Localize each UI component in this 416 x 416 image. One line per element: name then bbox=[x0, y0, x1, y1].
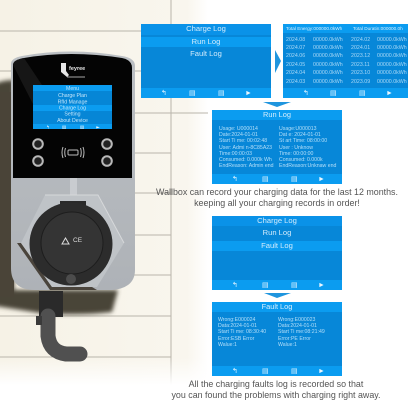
screen: fault log bbox=[212, 302, 342, 376]
display: ▤ bbox=[80, 125, 84, 130]
charger body bbox=[11, 52, 135, 290]
screen: charge log menu: ▤ bbox=[189, 90, 196, 96]
screen: monthly totals: 2024.02 2024.01 2023.12 2023.11 2023.10 2023.09 bbox=[351, 36, 370, 85]
screen: charge log menu bbox=[141, 24, 271, 98]
caption: charging records bbox=[156, 186, 398, 208]
screen: run log bbox=[212, 110, 342, 184]
screen: charge log menu: Charge Log bbox=[186, 24, 226, 33]
screen: monthly totals: 00000.0kWh 00000.0kWh 00000.0kWh 00000.0kWh 00000.0kWh 00000.0kWh bbox=[313, 36, 343, 85]
screen: fault log: Fault Log bbox=[262, 302, 292, 311]
screen: run log: Run Log bbox=[263, 110, 291, 119]
socket cover bbox=[30, 201, 112, 286]
screen: run log: Usage: U000014 Date:2024-01-01 Start Ti me: 00:02:48 User: Admi n-8C85A23 Time:00:00:03 Consumed: 0.000k Wh EndReason: Admin end bbox=[219, 126, 274, 169]
screen: charge log menu: ▤ bbox=[218, 90, 225, 96]
screen: monthly totals: ► bbox=[386, 90, 393, 96]
screen: fault log menu: Fault Log bbox=[261, 241, 293, 250]
control buttons bbox=[33, 139, 112, 166]
screen: monthly totals: ↰ bbox=[303, 90, 309, 96]
screen: fault log: ▤ bbox=[291, 368, 298, 374]
caption: fault records: you can found the problems with charging right away. bbox=[171, 390, 380, 400]
RFID symbol bbox=[62, 147, 84, 158]
caption: charging records: Wallbox can record your charging data for the last 12 months. bbox=[156, 186, 398, 196]
screen: fault log menu bbox=[212, 216, 342, 290]
display: Charge Log bbox=[59, 106, 86, 112]
display: ↰ bbox=[46, 124, 50, 130]
screen: fault log: ↰ bbox=[232, 368, 238, 374]
display: Setting bbox=[64, 112, 81, 118]
screen: fault log menu: Run Log bbox=[263, 228, 291, 237]
display bbox=[33, 85, 112, 130]
screen: charge log menu: Fault Log bbox=[190, 49, 222, 58]
screen: monthly totals: Total Duratin:000000.0h bbox=[353, 26, 403, 31]
wall background bbox=[0, 0, 208, 385]
caption: fault records bbox=[171, 378, 380, 400]
screen: fault log: ► bbox=[318, 368, 325, 374]
screen: monthly totals: 2024.08 2024.07 2024.06 2024.05 2024.04 2024.03 bbox=[286, 36, 305, 85]
screen: fault log menu: Charge Log bbox=[257, 216, 297, 225]
screen: charge log menu: ► bbox=[245, 90, 252, 96]
socket housing bbox=[17, 178, 124, 290]
caption: fault records: All the charging faults log is recorded so that bbox=[189, 378, 363, 388]
display: RfId Manage bbox=[58, 100, 87, 106]
logo: feyree bbox=[69, 66, 85, 72]
screen: run log: ↰ bbox=[232, 176, 238, 182]
screen: run log: Usage:U000013 Dat e: 2024-01-01 St art Time: 08:00:00 User : Unknow Time: 00:00:00 Consumed: 0.000k EndReason:Unknaw end bbox=[279, 126, 336, 169]
screen: run log: ▤ bbox=[262, 176, 269, 182]
screen: fault log menu: ▤ bbox=[262, 282, 269, 288]
display: About Device bbox=[57, 118, 88, 124]
socket cover: CE bbox=[73, 237, 83, 244]
screen: fault log menu: ↰ bbox=[232, 282, 238, 288]
screen: fault log: Wrong:E000024 Data:2024-01-01 Start Ti me: 08:30:40 Error:ESB Error Walue:1 bbox=[218, 317, 266, 348]
logo bbox=[61, 63, 85, 77]
cable bbox=[36, 291, 80, 354]
screen: monthly totals: 00000.0kWh 00000.0kWh 00000.0kWh 00000.0kWh 00000.0kWh 00000.0kWh bbox=[377, 36, 407, 85]
screen: monthly totals: Total Energy:000000.0kWh bbox=[286, 26, 342, 31]
display: ▤ bbox=[62, 125, 66, 130]
screen: run log: ▤ bbox=[291, 176, 298, 182]
black front panel bbox=[13, 54, 132, 178]
wall shadow bbox=[0, 80, 118, 314]
display: Charge Plan bbox=[58, 93, 87, 99]
screen: fault log menu: ► bbox=[318, 282, 325, 288]
screen: fault log: ▤ bbox=[262, 368, 269, 374]
screen: monthly totals: ▤ bbox=[330, 90, 337, 96]
screen: run log: ► bbox=[318, 176, 325, 182]
display: Menu bbox=[66, 86, 79, 92]
screen: monthly totals: ▤ bbox=[359, 90, 366, 96]
screen: fault log menu: ▤ bbox=[291, 282, 298, 288]
caption: charging records: keeping all your charging records in order! bbox=[194, 198, 360, 208]
screen: charge log menu: ↰ bbox=[161, 90, 167, 96]
screen: fault log: Wrong:E000023 Data:2024-01-01 Start Ti me:08:21:49 Error:PE Error Walue:1 bbox=[278, 317, 325, 348]
screen: charge log menu: Run Log bbox=[192, 37, 220, 46]
display: ► bbox=[96, 125, 100, 130]
screen: monthly totals bbox=[283, 24, 408, 98]
